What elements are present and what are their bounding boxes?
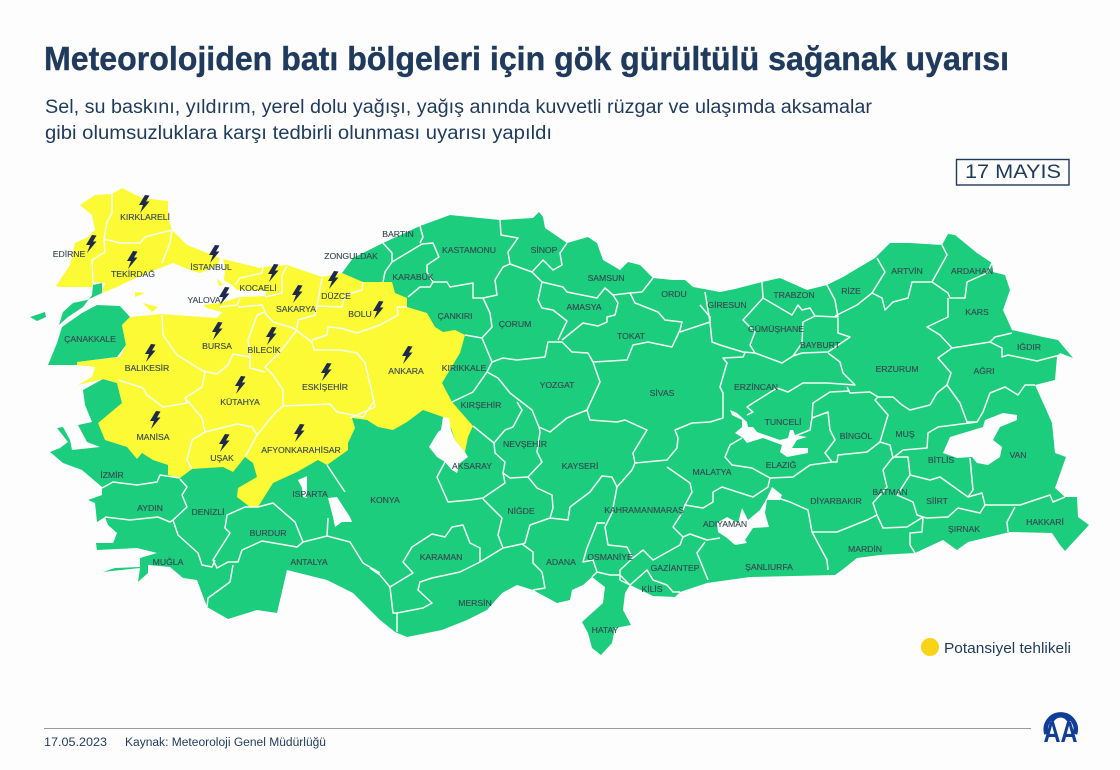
province labels: MANİSA <box>136 432 170 442</box>
province labels: ORDU <box>661 289 687 299</box>
province labels: BİNGÖL <box>840 431 872 441</box>
province labels: NEVŞEHİR <box>503 439 547 449</box>
province labels <box>53 212 1064 635</box>
province labels: KONYA <box>370 495 400 505</box>
province labels: DENİZLİ <box>192 507 224 517</box>
province labels: ÇANAKKALE <box>64 334 116 344</box>
province labels: BURSA <box>202 341 232 351</box>
province labels: ARTVİN <box>891 266 923 276</box>
province labels: ANKARA <box>388 366 424 376</box>
province labels: KIRŞEHİR <box>461 400 501 410</box>
province labels: BİLECİK <box>248 345 281 355</box>
AA logo: AA <box>1044 717 1078 749</box>
province labels: VAN <box>1009 450 1027 460</box>
footer source: Kaynak: Meteoroloji Genel Müdürlüğü <box>125 737 326 749</box>
province labels: RİZE <box>841 286 861 296</box>
title: Meteorolojiden batı bölgeleri için gök gürültülü sağanak uyarısı <box>44 41 1009 78</box>
province labels: KİLİS <box>642 584 663 594</box>
province labels: MALATYA <box>693 467 732 477</box>
province labels: KIRIKKALE <box>442 363 486 373</box>
footer rule <box>44 728 1031 730</box>
province labels: SİVAS <box>650 388 675 398</box>
yellow warning provinces <box>56 188 473 507</box>
province labels: ELAZIĞ <box>766 460 797 470</box>
province labels: AĞRI <box>973 366 995 376</box>
date box: 17 MAYIS <box>965 162 1061 183</box>
province labels: SAKARYA <box>276 304 316 314</box>
province labels: GİRESUN <box>707 300 747 310</box>
province labels: TRABZON <box>773 290 815 300</box>
province labels: İSTANBUL <box>190 262 232 272</box>
footer date: 17.05.2023 <box>44 737 107 749</box>
province labels: HATAY <box>592 625 619 635</box>
province borders <box>92 194 1065 632</box>
lightning icons <box>86 195 412 452</box>
province labels: GÜMÜŞHANE <box>748 324 804 334</box>
legend <box>921 638 1071 657</box>
province labels: HAKKARİ <box>1026 517 1064 527</box>
province labels: AFYONKARAHİSAR <box>261 445 341 455</box>
province labels: ERZURUM <box>875 364 919 374</box>
province labels: ANTALYA <box>290 557 328 567</box>
province labels: ÇORUM <box>499 319 531 329</box>
subtitle: gibi olumsuzluklara karşı tedbirli olunması uyarısı yapıldı <box>45 123 552 144</box>
subtitle <box>45 97 873 144</box>
province labels: BARTIN <box>382 229 414 239</box>
province labels: BOLU <box>348 309 372 319</box>
province labels: ARDAHAN <box>951 266 993 276</box>
province labels: KÜTAHYA <box>220 397 260 407</box>
province labels: OSMANİYE <box>587 552 633 562</box>
legend: Potansiyel tehlikeli <box>944 641 1071 657</box>
province labels: KOCAELİ <box>239 283 277 293</box>
province labels: MARDİN <box>848 544 882 554</box>
province labels: ADANA <box>546 557 576 567</box>
province labels: TOKAT <box>617 331 646 341</box>
province labels: YOZGAT <box>540 380 575 390</box>
province labels: SİNOP <box>531 245 558 255</box>
province labels: ESKİŞEHİR <box>302 382 348 392</box>
province labels: KARABÜK <box>392 272 434 282</box>
province labels: KARAMAN <box>420 552 462 562</box>
province labels: TEKİRDAĞ <box>111 269 155 279</box>
province labels: ZONGULDAK <box>324 251 378 261</box>
province labels: ŞIRNAK <box>948 524 980 534</box>
province labels: ADIYAMAN <box>703 519 747 529</box>
province labels: YALOVA <box>187 295 221 305</box>
map of Turkey <box>30 188 1089 655</box>
province labels: DİYARBAKIR <box>810 496 862 506</box>
province labels: DÜZCE <box>321 291 351 301</box>
province labels: KIRKLARELİ <box>120 212 170 222</box>
province labels: BAYBURT <box>800 340 841 350</box>
province labels: KAYSERİ <box>562 461 598 471</box>
province labels: ŞANLIURFA <box>745 562 793 572</box>
province labels: ÇANKIRI <box>438 311 472 321</box>
province labels: SİİRT <box>926 496 949 506</box>
province labels: MUŞ <box>895 429 915 439</box>
province labels: ERZİNCAN <box>734 382 778 392</box>
province labels: GAZİANTEP <box>651 563 700 573</box>
province labels: AKSARAY <box>452 461 492 471</box>
province labels: NİĞDE <box>507 506 535 516</box>
province labels: İZMİR <box>100 470 124 480</box>
province labels: SAMSUN <box>588 273 624 283</box>
lakes <box>298 410 1017 545</box>
date box <box>956 160 1069 185</box>
province labels: KAHRAMANMARAŞ <box>604 505 684 515</box>
green provinces <box>30 212 1089 655</box>
province labels: AYDIN <box>137 503 163 513</box>
province labels: UŞAK <box>210 453 234 463</box>
province labels: EDİRNE <box>53 249 86 259</box>
province labels: TUNCELİ <box>765 417 801 427</box>
province labels: BALIKESİR <box>125 363 169 373</box>
province labels: AMASYA <box>566 302 602 312</box>
province labels: KARS <box>965 307 989 317</box>
province labels: ISPARTA <box>292 489 328 499</box>
subtitle: Sel, su baskını, yıldırım, yerel dolu yağışı, yağış anında kuvvetli rüzgar ve ulaşımda aksamalar <box>45 97 873 118</box>
province labels: BURDUR <box>250 528 286 538</box>
province labels: BİTLİS <box>928 455 954 465</box>
province labels: IĞDIR <box>1017 342 1041 352</box>
province labels: MUĞLA <box>153 557 184 567</box>
province labels: BATMAN <box>872 487 908 497</box>
province labels: KASTAMONU <box>442 245 496 255</box>
province labels: MERSİN <box>458 598 492 608</box>
